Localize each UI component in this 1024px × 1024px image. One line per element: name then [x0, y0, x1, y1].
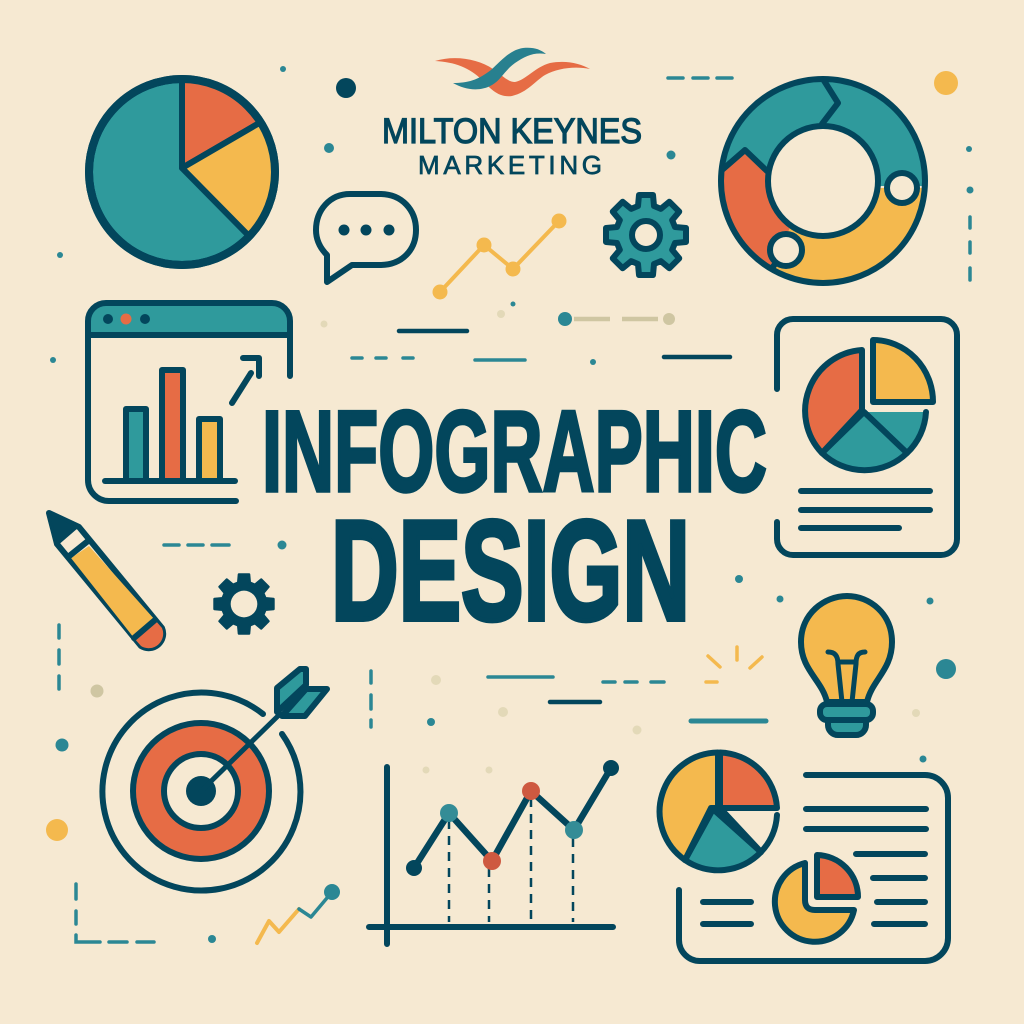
report card with pie chart — [777, 319, 957, 555]
bar chart — [105, 370, 235, 481]
logo text — [382, 112, 642, 180]
logo text: MILTON KEYNES — [382, 112, 642, 151]
icon: teal gear — [606, 195, 686, 275]
light rays — [706, 647, 762, 682]
large pie — [660, 752, 777, 870]
yellow line chart — [432, 214, 566, 300]
logo mark: swooshes — [435, 48, 590, 96]
small pie — [775, 855, 858, 942]
logo text: MARKETING — [418, 150, 602, 180]
light bulb — [801, 596, 892, 735]
arrow fletching — [277, 669, 327, 716]
line chart — [369, 760, 619, 944]
speech bubble — [316, 194, 416, 282]
logo: Milton Keynes Marketing — [382, 48, 642, 180]
arrow — [232, 358, 259, 403]
small zigzag chart bottom left — [257, 884, 340, 943]
panel frame — [679, 775, 948, 961]
donut cycle chart top right — [721, 79, 925, 283]
report panel with pies — [660, 752, 948, 961]
target with arrow — [102, 669, 327, 891]
pencil — [48, 512, 163, 648]
title: DESIGN — [331, 492, 690, 650]
accent dots and dashes — [46, 66, 974, 943]
browser window with bar chart — [88, 303, 290, 501]
title — [262, 387, 767, 650]
text lines — [703, 809, 926, 924]
icon: dark gear — [214, 574, 274, 634]
pie chart top left — [89, 79, 275, 265]
